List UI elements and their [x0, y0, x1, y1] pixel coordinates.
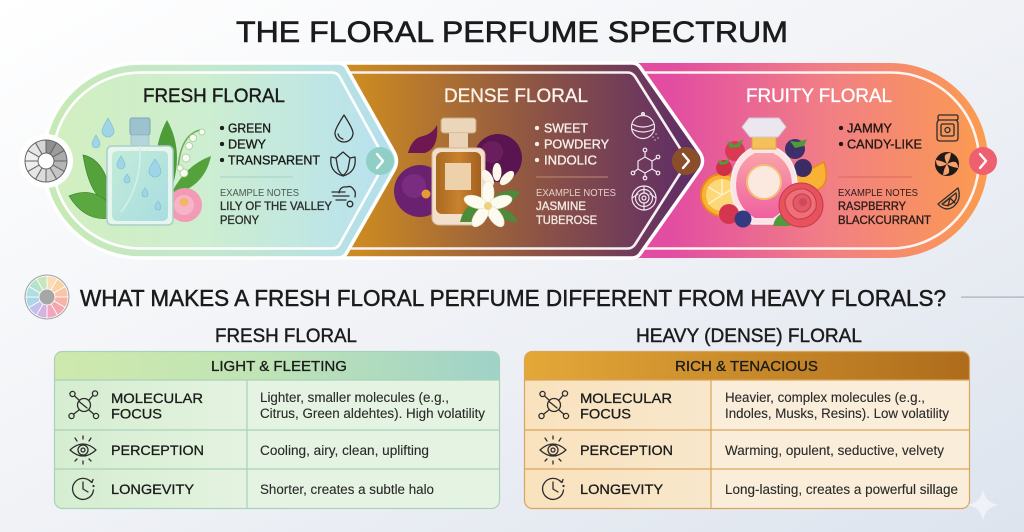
example notes: fresh: [220, 187, 332, 227]
bullet list: fruity traits: CANDY-LIKE: [847, 136, 922, 152]
panel: fruity floral: [600, 63, 997, 258]
row: molecular focus: Lighter, smaller molecules (e.g.,: [260, 390, 449, 405]
bullet list: dense traits: INDOLIC: [544, 152, 597, 168]
subheading: fresh floral: FRESH FLORAL: [215, 326, 357, 347]
row: longevity: LONGEVITY: [111, 481, 195, 497]
arrow button: fruity: [969, 147, 997, 175]
example notes: dense: JASMINE: [536, 199, 586, 213]
row: molecular focus: FOCUS: [580, 406, 631, 422]
icon: water drop: [335, 115, 353, 142]
table: fresh floral: [54, 352, 500, 508]
table: heavy floral: [524, 352, 970, 508]
bullet list: fruity traits: JAMMY: [847, 120, 892, 136]
table header: light and fleeting: [54, 352, 500, 380]
example notes: fresh: LILY OF THE VALLEY: [220, 199, 332, 213]
icon: powder compact: [632, 112, 658, 140]
row: molecular focus: MOLECULAR: [580, 390, 672, 406]
example notes: fresh: PEONY: [220, 213, 259, 227]
example notes: fruity: [838, 187, 932, 227]
row: perception: [70, 436, 429, 464]
divider: [220, 176, 293, 178]
icon: grayscale scent wheel: [19, 134, 73, 188]
table header: rich and tenacious: [524, 352, 970, 380]
heading: dense floral: DENSE FLORAL: [444, 86, 588, 107]
row: longevity: Long-lasting, creates a powerful sillage: [725, 482, 958, 497]
row: molecular focus: Citrus, Green aldehtes). High volatility: [260, 406, 485, 421]
bullet list: fresh traits: GREEN: [228, 120, 271, 136]
heading: fruity floral: FRUITY FLORAL: [746, 86, 892, 107]
row: longevity: Shorter, creates a subtle halo: [260, 482, 434, 497]
bullet list: dense traits: POWDERY: [544, 136, 609, 152]
row: longevity: [543, 478, 958, 499]
bullet list: fresh traits: [220, 120, 320, 168]
arrow button: dense: [672, 147, 700, 175]
example notes: dense: EXAMPLE NOTES: [536, 187, 616, 199]
row: perception: PERCEPTION: [580, 442, 673, 458]
example notes: fruity: EXAMPLE NOTES: [838, 187, 918, 199]
illustration: fresh perfume bottle: [69, 118, 211, 225]
table header: light and fleeting: LIGHT & FLEETING: [211, 359, 347, 375]
divider: [536, 176, 608, 178]
row: longevity: LONGEVITY: [580, 481, 664, 497]
illustration: fruity perfume bottle: [701, 118, 826, 228]
panel: fresh floral: [43, 63, 397, 258]
example notes: fresh: EXAMPLE NOTES: [220, 187, 299, 199]
icon: jam jar: [937, 115, 958, 141]
row: longevity: [73, 478, 434, 499]
row: molecular focus: [69, 390, 485, 422]
title: THE FLORAL PERFUME SPECTRUM: [236, 16, 788, 49]
subheading: heavy floral: HEAVY (DENSE) FLORAL: [636, 326, 862, 347]
icon: pastel scent wheel: [24, 274, 70, 320]
bullet list: fresh traits: DEWY: [228, 136, 266, 152]
icon: tuberose bloom: [632, 186, 656, 210]
example notes: dense: TUBEROSE: [536, 213, 597, 227]
row: molecular focus: Heavier, complex molecules (e.g.,: [725, 390, 925, 405]
icon: molecule: [631, 148, 660, 180]
icon: lotus flower: [331, 152, 355, 176]
example notes: dense: [536, 187, 616, 227]
bullet list: dense traits: [535, 120, 609, 168]
icon: orange slice: [938, 188, 959, 209]
panel: dense floral: [320, 63, 702, 258]
section heading: WHAT MAKES A FRESH FLORAL PERFUME DIFFERENT FROM HEAVY FLORALS?: [80, 285, 946, 311]
table header: rich and tenacious: RICH & TENACIOUS: [675, 359, 818, 375]
row: perception: Warming, opulent, seductive, velvety: [725, 443, 944, 458]
example notes: fruity: RASPBERRY: [838, 199, 906, 213]
bullet list: fruity traits: [839, 120, 922, 152]
row: molecular focus: MOLECULAR: [111, 390, 203, 406]
illustration: dense perfume bottle: [394, 118, 522, 230]
row: perception: [540, 436, 944, 464]
arrow button: fresh: [366, 147, 394, 175]
icon: candy swirl: [935, 152, 959, 176]
divider: [838, 176, 912, 178]
row: molecular focus: FOCUS: [111, 406, 162, 422]
row: molecular focus: [539, 390, 949, 422]
heading: fresh floral: FRESH FLORAL: [143, 86, 285, 107]
row: perception: PERCEPTION: [111, 442, 204, 458]
example notes: fruity: BLACKCURRANT: [838, 213, 932, 227]
icon: wind and cloud: [332, 186, 355, 207]
icon: sparkle: [967, 489, 999, 521]
row: perception: Cooling, airy, clean, uplifting: [260, 443, 429, 458]
bullet list: dense traits: SWEET: [544, 120, 588, 136]
row: molecular focus: Indoles, Musks, Resins). Low volatility: [725, 406, 949, 421]
bullet list: fresh traits: TRANSPARENT: [228, 152, 320, 168]
